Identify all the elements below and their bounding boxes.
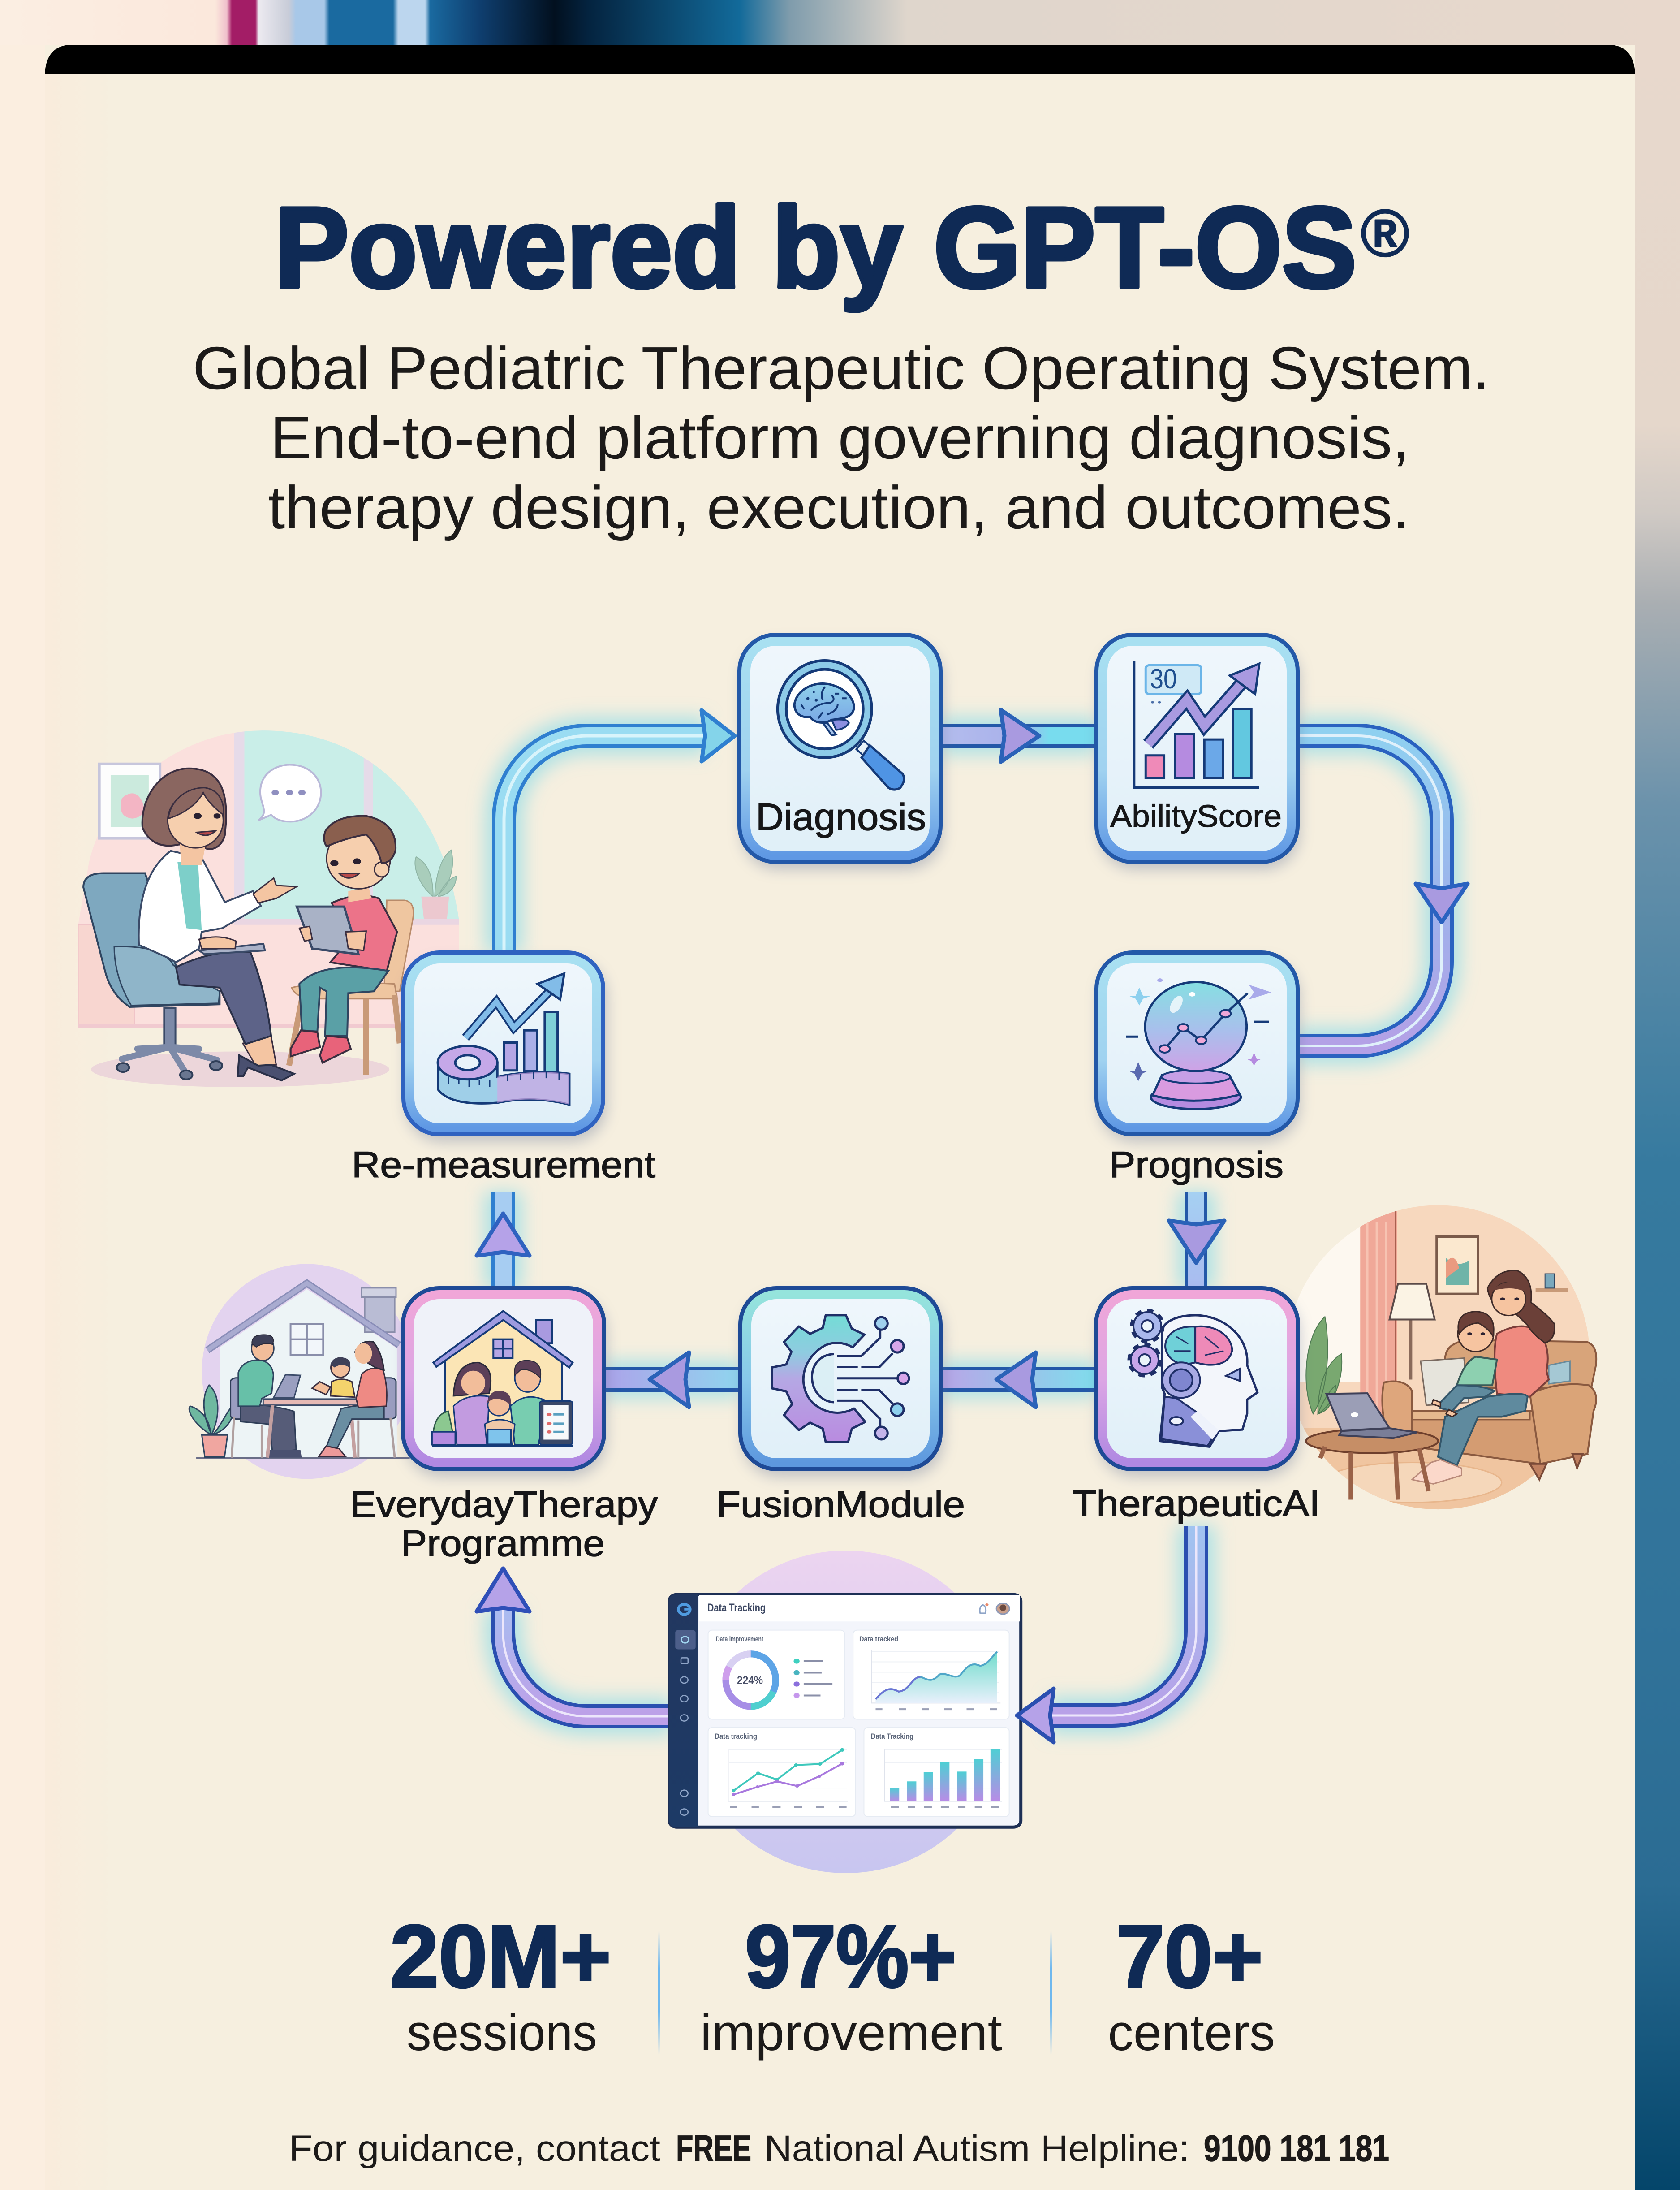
panel: diagnosis node [740, 635, 940, 862]
illustration: mother and child on sofa [1296, 1205, 1598, 1509]
icon: family in house [432, 1311, 573, 1446]
label: re-measurement: Re-measurement [352, 1145, 655, 1185]
illustration: family at home table [189, 1264, 412, 1479]
label: fusionmodule: FusionModule [716, 1484, 965, 1525]
panel: re-measurement node [404, 953, 603, 1134]
panel: data dashboard [669, 1594, 1021, 1827]
panel: prognosis node [1097, 953, 1297, 1134]
arrow: diagnosis to abilityscore [941, 710, 1096, 762]
icon: crystal ball [1126, 978, 1271, 1109]
arrow: abilityscore to prognosis [1297, 736, 1468, 1046]
icon: magnifier with brain [778, 661, 904, 790]
helpline text: 9100 181 181 [1204, 2128, 1389, 2169]
arrow: therapeuticai to dashboard [1048, 1526, 1196, 1715]
icon text: 30: 30 [1150, 664, 1177, 695]
subtitle text block: Global Pediatric Therapeutic Operating System. [193, 334, 1490, 402]
subtitle text block [193, 334, 1490, 541]
label: diagnosis: Diagnosis [756, 796, 926, 838]
stat: improvement: improvement [700, 2004, 1002, 2061]
stat: centers: centers [1108, 2004, 1275, 2061]
icon: score chart [1134, 661, 1259, 788]
icon: tape measure and chart [438, 973, 569, 1105]
label: prognosis: Prognosis [1109, 1145, 1284, 1185]
panel: therapeuticai node [1096, 1288, 1298, 1469]
label: everydaytherapy programme [350, 1484, 658, 1564]
icon: gears [1130, 1312, 1162, 1374]
arrow: prognosis to therapeuticai [1169, 1192, 1224, 1288]
icon: gear and circuits [772, 1315, 909, 1442]
title: ® [1361, 195, 1409, 271]
subtitle text block: therapy design, execution, and outcomes. [268, 474, 1409, 541]
stat: centers: 70+ [1116, 1907, 1263, 2006]
panel: data dashboard: Data tracked [859, 1635, 898, 1643]
title: Powered by GPT-OS [274, 184, 1357, 312]
arrow: fusionmodule to everydaytherapy [604, 1352, 740, 1407]
stat: centers [1108, 1907, 1275, 2061]
helpline text: National Autism Helpline: [764, 2128, 1189, 2169]
label: therapeuticai: TherapeuticAI [1072, 1483, 1320, 1524]
label: abilityscore: AbilityScore [1110, 799, 1282, 834]
panel: data dashboard: Data improvement [716, 1635, 763, 1643]
label: everydaytherapy programme: EverydayTherapy [350, 1484, 658, 1525]
stat: improvement [700, 1907, 1002, 2061]
glow behind pipes [503, 736, 1442, 1716]
arrowhead: therapeuticai into dashboard [1017, 1689, 1054, 1742]
stat: sessions [390, 1907, 611, 2061]
illustration: clinician with child [76, 728, 461, 1087]
arrow: everydaytherapy to re-measurement [477, 1192, 530, 1288]
box shadows [405, 643, 1300, 1477]
panel: abilityscore node [1097, 635, 1297, 862]
label: everydaytherapy programme: Programme [401, 1523, 605, 1564]
helpline text: For guidance, contact [289, 2128, 660, 2169]
stat: sessions: 20M+ [390, 1907, 611, 2006]
icon: ai head with brain [1160, 1315, 1258, 1447]
panel: data dashboard: Data Tracking [707, 1602, 766, 1614]
subtitle text block: End-to-end platform governing diagnosis, [270, 404, 1409, 471]
panel: data dashboard: Data Tracking [871, 1732, 913, 1741]
stat: improvement: 97%+ [745, 1907, 956, 2006]
arrow: re-measurement to diagnosis [504, 710, 735, 952]
stats row [390, 1907, 1275, 2061]
backdrop circle: dashboard [685, 1551, 1007, 1873]
arrow: therapeuticai to fusionmodule [941, 1352, 1096, 1407]
helpline text: FREE [676, 2128, 751, 2169]
panel: everydaytherapy node [403, 1288, 604, 1469]
arrow: dashboard to everydaytherapy [477, 1568, 672, 1716]
panel: fusionmodule node [741, 1288, 940, 1469]
stat: sessions: sessions [407, 2004, 597, 2061]
panel: data dashboard: Data tracking [715, 1732, 757, 1741]
panel: data dashboard: 224% [737, 1674, 763, 1687]
helpline text [289, 2128, 1389, 2169]
